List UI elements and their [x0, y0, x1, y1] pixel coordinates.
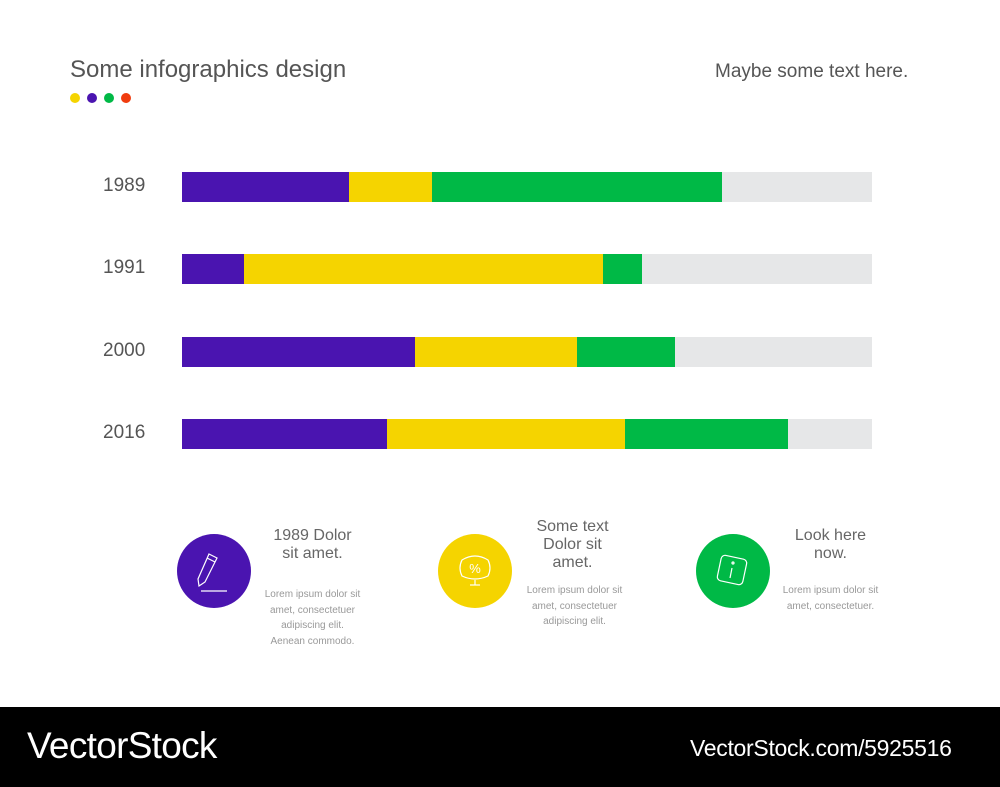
year label 1989: 1989 — [103, 175, 145, 196]
year label 2000: 2000 — [103, 340, 145, 361]
bar 2016 — [182, 419, 872, 449]
text 1: Aenean commodo. — [271, 636, 354, 646]
heading 3: now. — [814, 545, 847, 562]
heading 1: sit amet. — [282, 545, 343, 562]
icon: pencil — [177, 534, 251, 608]
text 1: Lorem ipsum dolor sit — [265, 589, 360, 600]
text 1: amet, consectetuer — [270, 604, 355, 616]
footer — [0, 707, 1000, 787]
text 2 — [527, 585, 622, 627]
year label 2016: 2016 — [103, 422, 145, 443]
subtitle: Maybe some text here. — [715, 61, 908, 82]
heading 2: Dolor sit — [543, 536, 602, 553]
text 1: adipiscing elit. — [281, 620, 344, 631]
color dots — [70, 93, 131, 103]
heading 3 — [795, 527, 866, 562]
text 3 — [783, 585, 878, 612]
text 2: Lorem ipsum dolor sit — [527, 585, 622, 596]
text 3: Lorem ipsum dolor sit — [783, 585, 878, 596]
title: Some infographics design — [70, 56, 346, 83]
bar 1991 — [182, 254, 872, 284]
icon: percent sign — [438, 534, 512, 608]
icon: info — [696, 534, 770, 608]
heading 2 — [536, 518, 609, 571]
footer logo: VectorStock — [27, 725, 217, 766]
bar 1989 — [182, 172, 872, 202]
year label 1991: 1991 — [103, 257, 145, 278]
footer url: VectorStock.com/5925516 — [690, 735, 952, 761]
heading 1 — [273, 527, 352, 562]
text 2: amet, consectetuer — [532, 600, 617, 612]
heading 1: 1989 Dolor — [273, 527, 352, 544]
text 3: amet, consectetuer. — [787, 600, 874, 612]
text 1 — [265, 589, 360, 646]
heading 2: Some text — [536, 518, 609, 535]
icon: percent sign: % — [469, 561, 481, 576]
heading 3: Look here — [795, 527, 866, 544]
heading 2: amet. — [552, 554, 592, 571]
bar 2000 — [182, 337, 872, 367]
text 2: adipiscing elit. — [543, 616, 606, 627]
